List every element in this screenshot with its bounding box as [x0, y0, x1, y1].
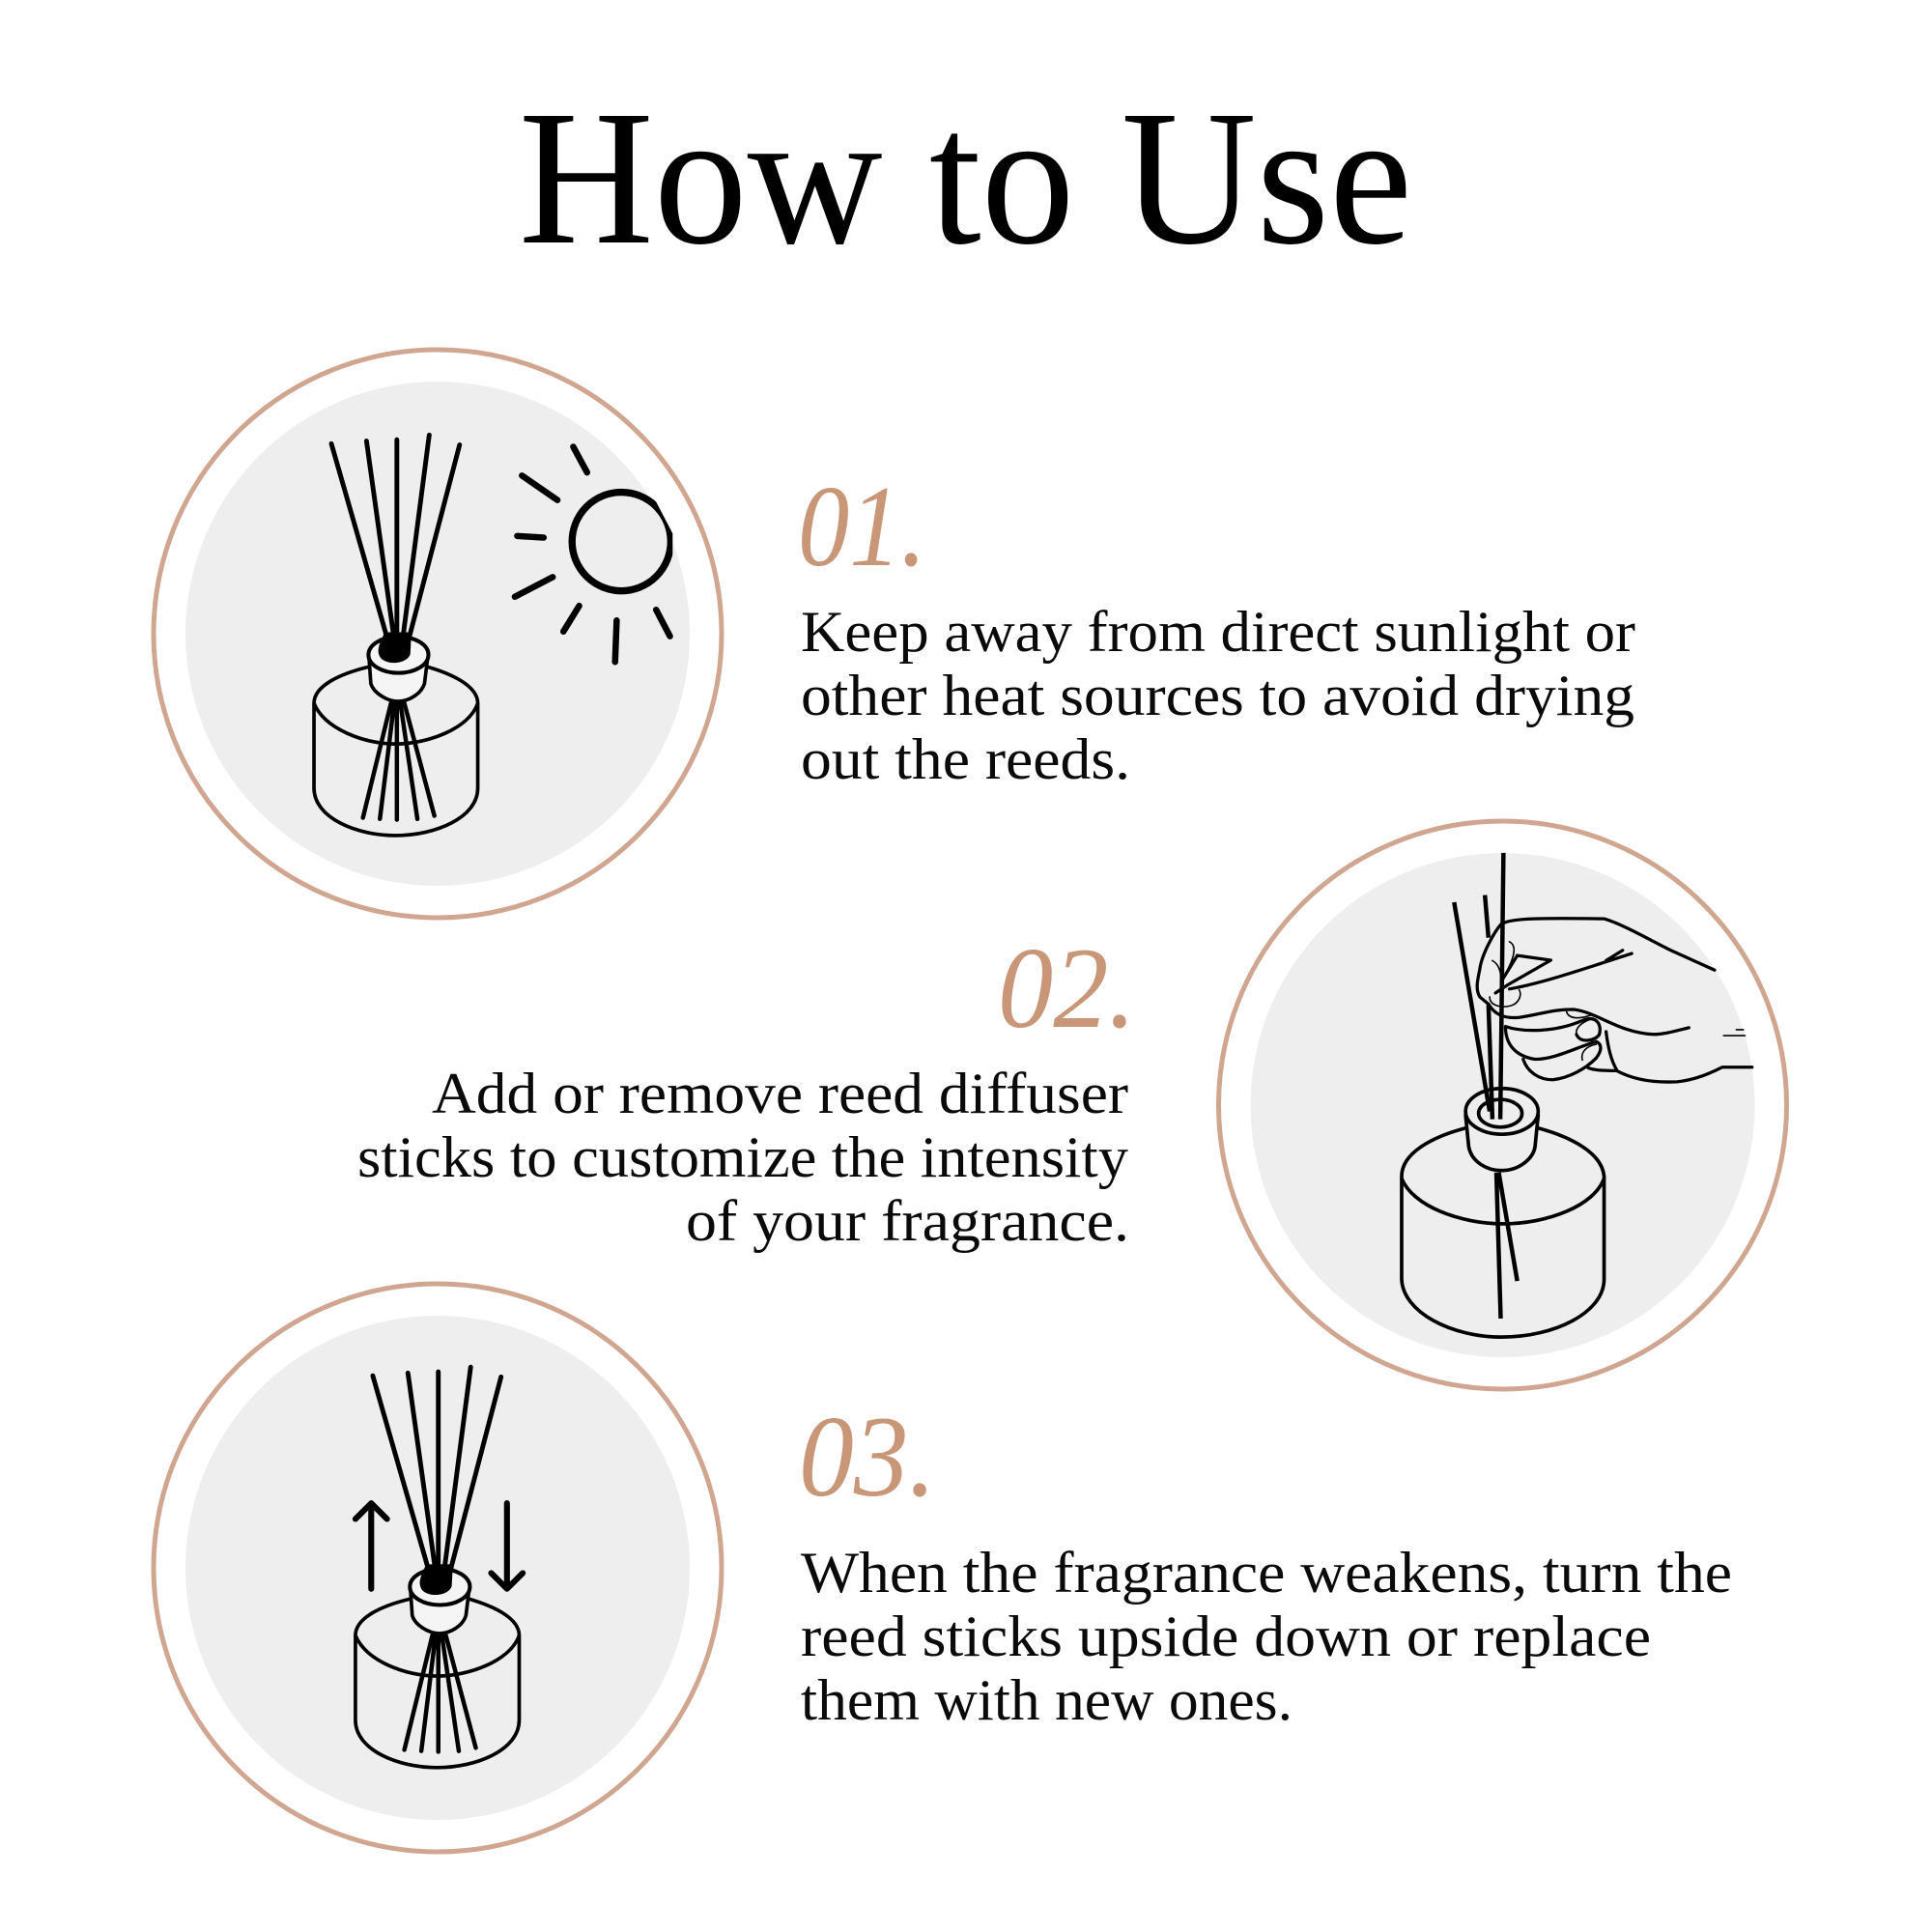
title: How to Use — [519, 71, 1412, 285]
cork rim — [368, 637, 429, 673]
cork — [369, 655, 428, 701]
step 3 text: them with new ones. — [801, 1668, 1293, 1732]
panel: step 1 illustration — [154, 350, 722, 918]
cork hole — [1479, 1099, 1522, 1127]
reed cluster — [420, 1564, 453, 1595]
reed cluster — [379, 633, 412, 663]
sun — [572, 493, 670, 591]
step 2 text: sticks to customize the intensity — [357, 1125, 1128, 1189]
reeds held in hand — [1454, 853, 1503, 1120]
panel: step 3 illustration — [154, 1284, 722, 1852]
cork — [1465, 1116, 1538, 1171]
icon: reed diffuser with flip arrows — [355, 1367, 523, 1768]
step 1 text: Keep away from direct sunlight or — [801, 600, 1635, 664]
reeds in bottle — [363, 703, 435, 820]
arrow down — [491, 1503, 523, 1589]
step 3 text: reed sticks upside down or replace — [801, 1605, 1651, 1668]
step 1 text: out the reeds. — [801, 727, 1130, 791]
step 3 text — [801, 1541, 1732, 1732]
step 1 grey disc — [185, 382, 690, 886]
step 3 grey disc — [185, 1316, 690, 1820]
icon: hand adding reeds to diffuser — [1402, 853, 1752, 1337]
diffuser — [355, 1367, 519, 1768]
step 3 number: 03. — [799, 1392, 936, 1520]
step 2 number: 02. — [998, 923, 1136, 1052]
step 1 text — [801, 600, 1635, 791]
step 3 text: When the fragrance weakens, turn the — [801, 1541, 1732, 1605]
arrow up — [355, 1503, 387, 1589]
step 1 number: 01. — [798, 462, 926, 590]
reeds in bottle — [405, 1635, 476, 1751]
step 1 text: other heat sources to avoid drying — [801, 664, 1634, 727]
icon: reed diffuser and sun — [314, 435, 670, 836]
step 3 outer ring — [154, 1284, 722, 1852]
reeds in bottle — [1496, 1173, 1518, 1319]
finger details — [1490, 942, 1745, 1060]
step 2 text: of your fragrance. — [686, 1189, 1129, 1253]
step 2 text: Add or remove reed diffuser — [432, 1062, 1128, 1125]
reeds above cork — [373, 1367, 501, 1573]
bottle — [1402, 1128, 1605, 1337]
reeds above cork — [331, 435, 460, 640]
hand outline — [1477, 919, 1752, 1082]
cork rim — [410, 1569, 469, 1605]
step 2 text — [357, 1062, 1129, 1253]
step 2 grey disc — [1250, 853, 1754, 1357]
cork — [411, 1587, 469, 1634]
step 1 outer ring — [154, 350, 722, 918]
panel: step 2 illustration — [1219, 821, 1787, 1389]
bottle — [355, 1599, 519, 1768]
step 2 outer ring — [1219, 821, 1787, 1389]
bottle — [314, 667, 478, 836]
sun rays — [515, 447, 670, 662]
cork rim — [1465, 1089, 1538, 1134]
